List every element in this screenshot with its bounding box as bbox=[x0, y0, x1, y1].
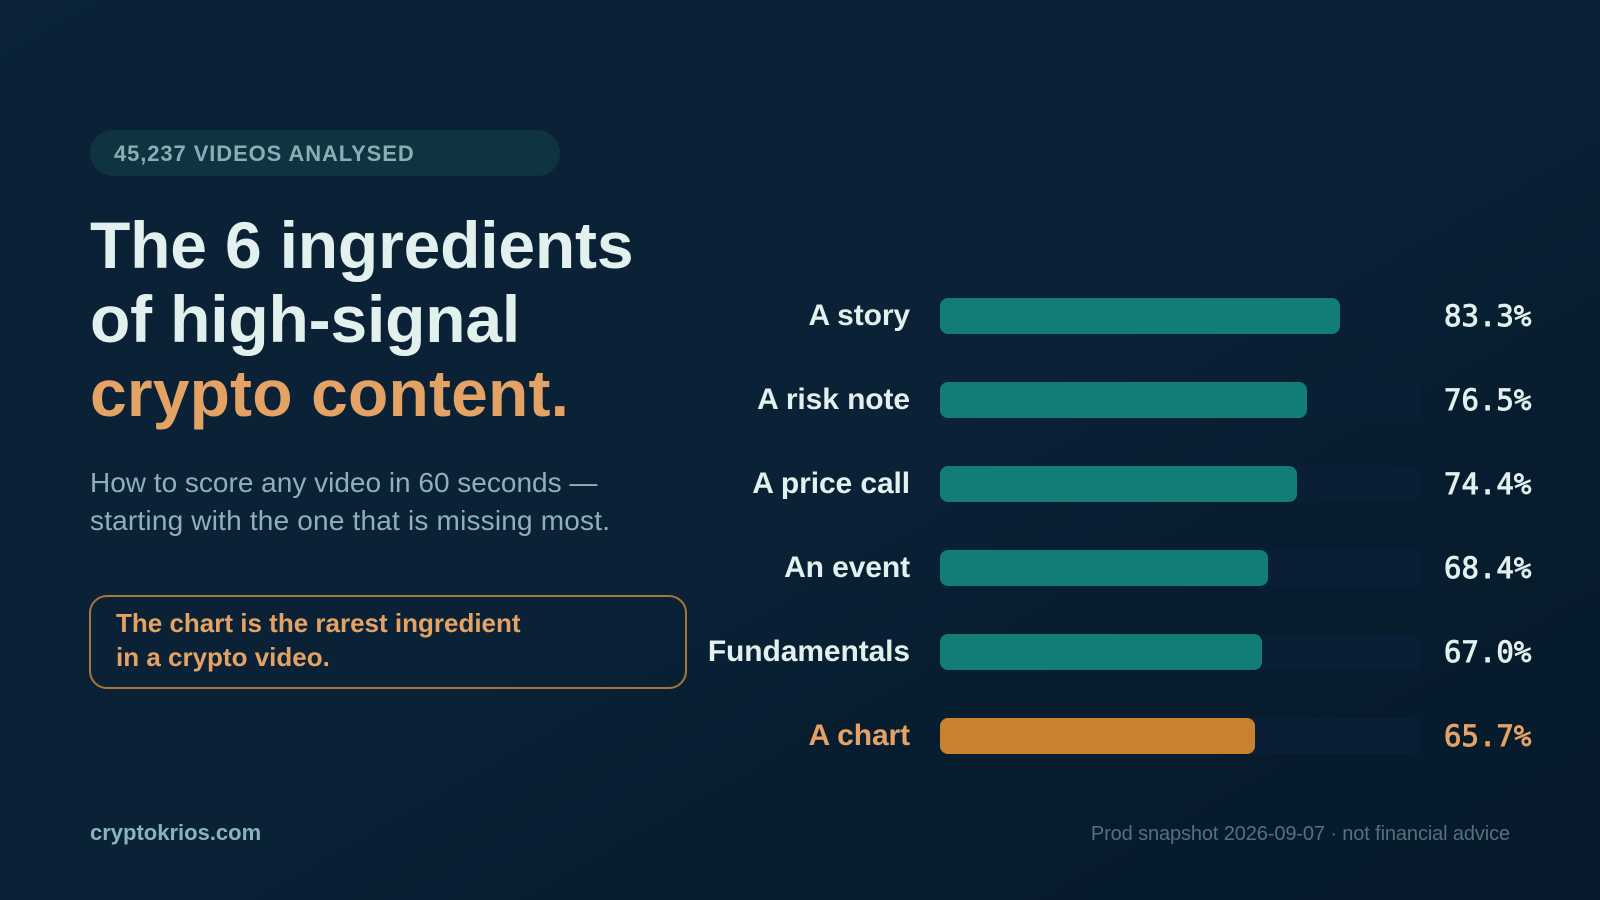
badge: videos analysed bbox=[90, 130, 560, 176]
row: Fundamentals: 67.0% bbox=[1444, 635, 1531, 669]
row: A story: A story bbox=[808, 299, 910, 332]
title: crypto content. bbox=[90, 356, 569, 430]
row: An event bbox=[784, 550, 1532, 586]
row: A risk note bbox=[757, 382, 1532, 418]
footer: site: cryptokrios.com bbox=[90, 820, 261, 845]
row: An event: An event bbox=[784, 551, 910, 584]
row: A story: 83.3% bbox=[1444, 299, 1531, 333]
title bbox=[90, 208, 633, 430]
title: of high-signal bbox=[90, 282, 520, 356]
footer: note: Prod snapshot 2026-09-07 · not financial advice bbox=[1091, 823, 1510, 845]
row: A chart (highlighted) bbox=[808, 718, 1532, 754]
row: A chart (highlighted): 65.7% bbox=[1444, 719, 1531, 753]
row: A chart (highlighted): A chart bbox=[808, 719, 910, 752]
row: Fundamentals bbox=[708, 634, 1532, 670]
subtitle: starting with the one that is missing most. bbox=[90, 505, 610, 536]
row: Fundamentals: Fundamentals bbox=[708, 635, 910, 668]
subtitle bbox=[90, 467, 610, 536]
callout: in a crypto video. bbox=[116, 642, 330, 672]
badge: videos analysed: 45,237 VIDEOS ANALYSED bbox=[114, 141, 415, 166]
row: A price call: 74.4% bbox=[1444, 467, 1531, 501]
row: A risk note: A risk note bbox=[757, 383, 910, 416]
callout: The chart is the rarest ingredient bbox=[116, 608, 521, 638]
row: A story bbox=[808, 298, 1532, 334]
callout bbox=[89, 595, 687, 689]
row: An event: 68.4% bbox=[1444, 551, 1531, 585]
row: A risk note: 76.5% bbox=[1444, 383, 1531, 417]
row: A price call bbox=[752, 466, 1532, 502]
bar chart bbox=[708, 298, 1532, 754]
title: The 6 ingredients bbox=[90, 208, 633, 282]
row: A price call: A price call bbox=[752, 467, 910, 500]
subtitle: How to score any video in 60 seconds — bbox=[90, 467, 597, 498]
